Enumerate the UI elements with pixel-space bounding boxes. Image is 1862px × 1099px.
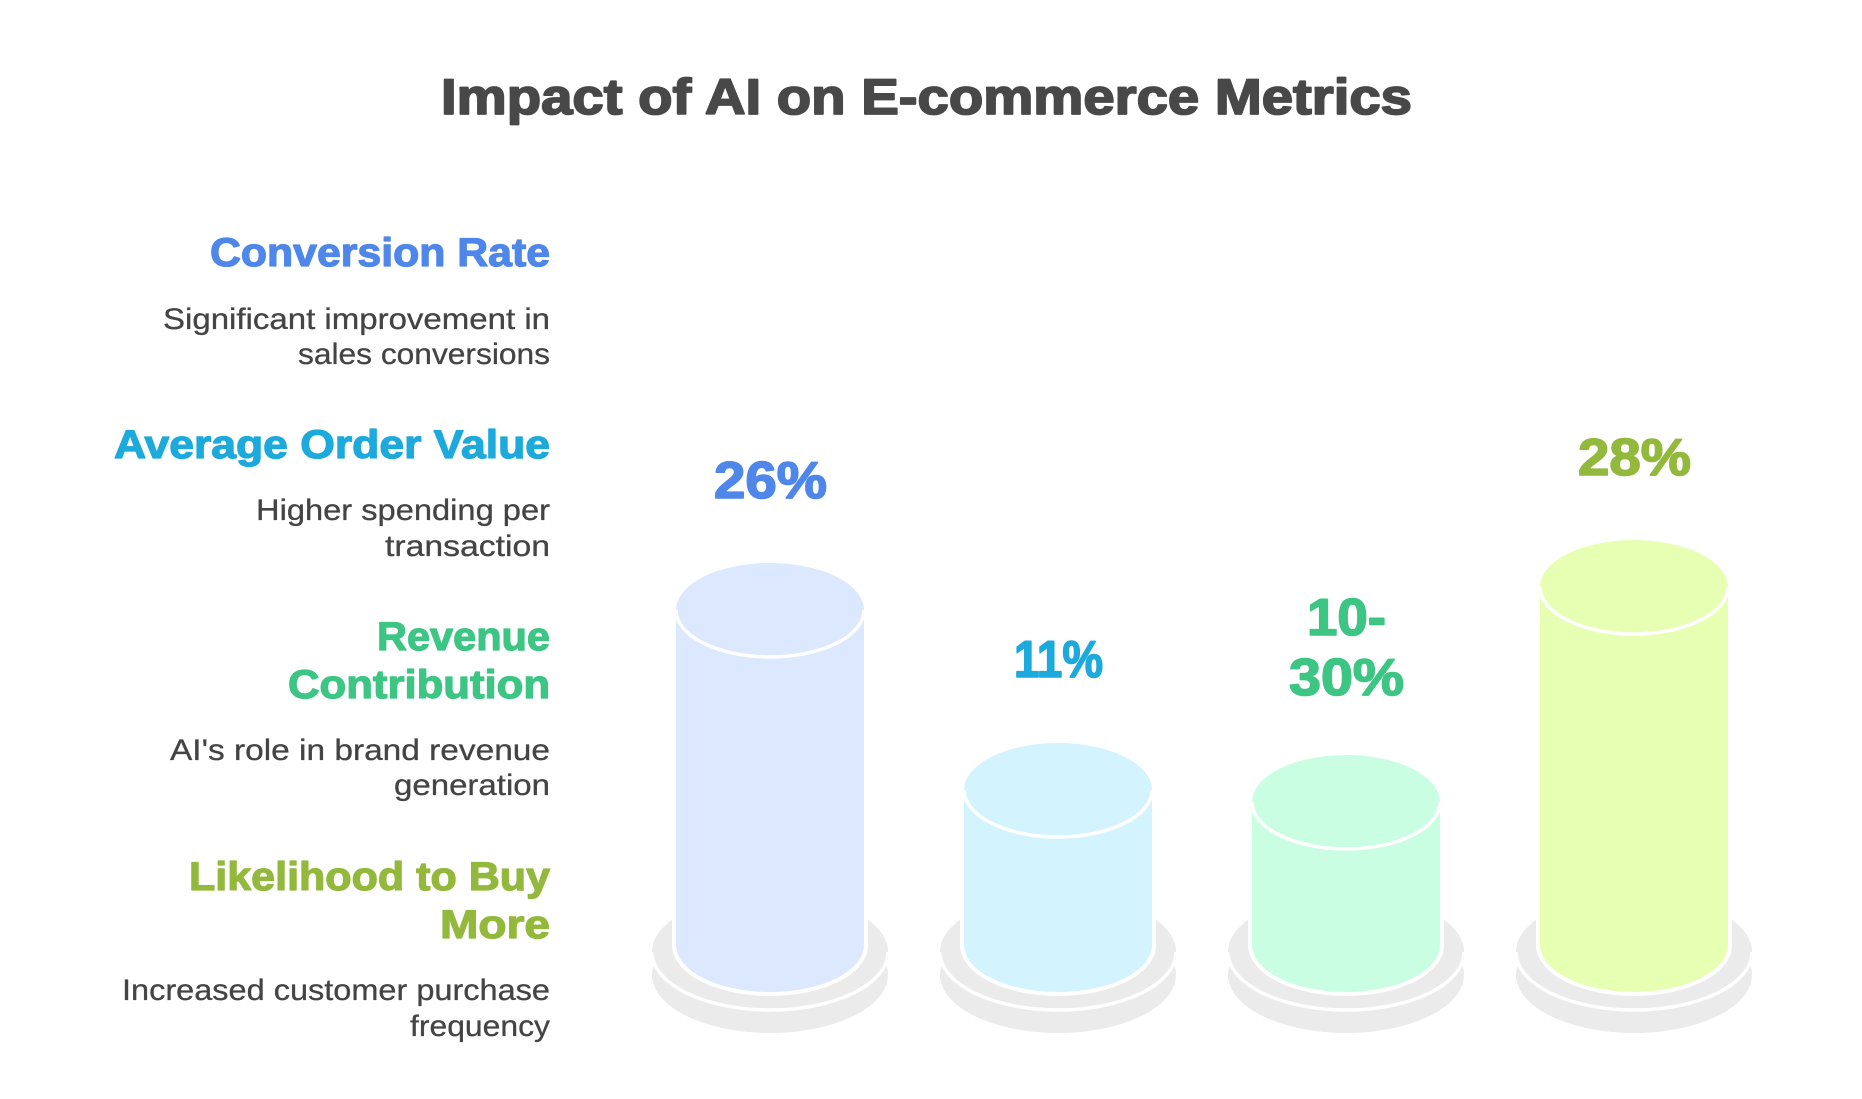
value: 10-30% [1289,589,1404,707]
metric: likelihood to buy more: More [440,903,550,947]
bar: revenue contribution 10-30% [1228,589,1464,1033]
bar: conversion rate 26% [652,452,888,1033]
panel: metric descriptions [114,231,551,1043]
metric: average order value: Average Order Value [114,423,550,467]
metric: conversion rate: sales conversions [298,338,550,371]
value: 26%: 26% [714,452,827,510]
metric: revenue contribution: Revenue [377,615,550,659]
metric: revenue contribution: generation [394,769,550,802]
metric: revenue contribution: Contribution [288,663,550,707]
bar: average order value 11% [940,631,1176,1033]
metric: average order value: Higher spending per [256,494,550,527]
chart: cylinder bars [652,429,1752,1033]
value: 28%: 28% [1578,429,1691,487]
metric: revenue contribution: AI's role in brand revenue [170,734,550,767]
metric: conversion rate: Significant improvement in [163,303,550,336]
metric: likelihood to buy more: Likelihood to Buy [189,855,551,899]
metric: likelihood to buy more: Increased customer purchase [122,974,550,1007]
value: 10-30%: 10- [1307,589,1386,647]
metric: revenue contribution [170,615,550,802]
metric: likelihood to buy more [122,855,551,1043]
bar: likelihood to buy more 28% [1516,429,1752,1033]
metric: conversion rate: Conversion Rate [210,231,550,275]
metric: conversion rate [163,231,550,371]
metric: average order value [114,423,550,563]
value: 11%: 11% [1014,631,1103,689]
title: Impact of AI on E-commerce Metrics [441,69,1412,125]
metric: likelihood to buy more: frequency [410,1010,550,1043]
metric: average order value: transaction [385,530,550,563]
value: 10-30%: 30% [1289,649,1404,707]
